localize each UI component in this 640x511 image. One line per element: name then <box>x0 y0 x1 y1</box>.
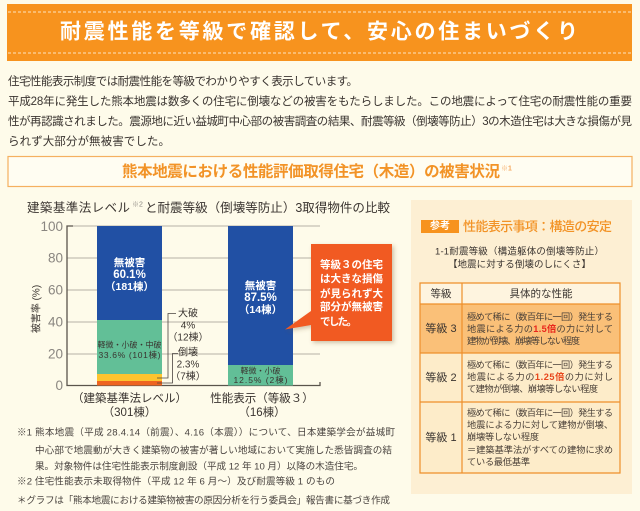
footnotes: ＊グラフは「熊本地震における建築物被害の原因分析を行う委員会」報告書に基づき作成 <box>17 494 390 506</box>
x axis labels: （301棟） <box>103 405 156 419</box>
chart title <box>27 200 390 215</box>
y axis tick labels: 80 <box>48 250 63 266</box>
row: grade 3 <box>425 311 613 346</box>
table header: 具体的な性能 <box>510 287 573 300</box>
row: grade 2 <box>425 359 613 394</box>
title banner <box>7 4 632 61</box>
reference badge <box>421 219 459 233</box>
callout: 部分が無被害 <box>320 300 383 313</box>
callout: が見られず大 <box>320 287 384 300</box>
intro text: 住宅性能表示制度では耐震性能を等級でわかりやすく表示しています。 <box>8 74 358 88</box>
grid lines and axis <box>67 226 320 386</box>
bar: building standard level: 60.1% <box>113 269 146 281</box>
section heading: ※1 <box>501 164 512 172</box>
panel subtitle: 1-1耐震等級（構造躯体の倒壊等防止） <box>435 246 604 258</box>
y axis tick labels: 40 <box>48 314 63 330</box>
chart title: 建築基準法レベル <box>27 200 130 215</box>
callout: 等級３の住宅 <box>320 258 384 271</box>
label: collapse: 2.3% <box>177 360 200 370</box>
row: grade 1: ＝建築基準法がすべての建物に求め <box>467 444 613 455</box>
panel heading: 性能表示事項：構造の安定 <box>463 219 612 234</box>
row: grade 2: て建物が倒壊、崩壊等しない程度 <box>467 383 598 394</box>
row: grade 2: 地震による力の1.25倍の力に対し <box>467 371 613 382</box>
table header: 等級 <box>430 287 452 300</box>
label: collapse: 倒壊 <box>178 346 198 358</box>
x axis labels: （建築基準法レベル） <box>72 391 187 405</box>
intro text <box>8 74 632 148</box>
bar: building standard level: 軽微・小破・中破 <box>98 340 162 350</box>
panel subtitle <box>435 246 604 270</box>
x axis labels: （16棟） <box>238 405 286 419</box>
intro text: 平成28年に発生した熊本地震は数多くの住宅に倒壊などの被害をもたらしました。この地震によって住宅の耐震性能の重要 <box>8 94 632 108</box>
y axis tick labels: 60 <box>48 282 63 298</box>
footnotes: 果。対象物件は住宅性能表示制度創設（平成 12 年 10 月）以降の木造住宅。 <box>35 460 363 472</box>
y axis tick labels <box>40 219 63 393</box>
row: grade 2: 極めて稀に（数百年に一回）発生する <box>467 359 613 370</box>
intro text: 性が再認識されました。震源地に近い益城町中心部の被害調査の結果、耐震等級（倒壊等防止）3の木造住宅は大きな損傷が見 <box>8 114 632 128</box>
panel subtitle: 【地震に対する倒壊のしにくさ】 <box>448 258 591 270</box>
row: grade 3: 地震による力の1.5倍の力に対して <box>467 323 613 334</box>
x axis labels <box>72 391 314 419</box>
bar: grade 3: （14棟） <box>239 303 282 316</box>
bar: building standard level: 無被害 <box>114 256 145 269</box>
label: collapse: （7棟） <box>170 370 206 382</box>
label: major damage: 4% <box>181 320 195 332</box>
y axis title: 被害率 (%) <box>30 285 42 333</box>
footnotes: ※1 <box>17 428 32 438</box>
chart title: ※2 <box>132 200 143 208</box>
callout <box>285 244 392 341</box>
section heading <box>8 156 632 186</box>
title banner: 耐震性能を等級で確認して、安心の住まいづくり <box>60 20 578 44</box>
row: grade 3: 等級 3 <box>425 321 457 335</box>
chart title: と耐震等級（倒壊等防止）3取得物件の比較 <box>145 200 390 215</box>
footnotes <box>17 426 395 506</box>
row: grade 1: 等級 1 <box>425 430 457 444</box>
y axis tick labels: 0 <box>55 378 63 393</box>
row: grade 3: 建物が倒壊、崩壊等しない程度 <box>467 335 580 346</box>
y axis tick labels: 20 <box>48 346 63 362</box>
table header <box>430 287 573 300</box>
reference badge: 参考 <box>430 219 450 232</box>
table <box>420 283 620 473</box>
label: major damage: 大破 <box>178 306 198 320</box>
footnotes: 熊本地震（平成 28.4.14（前震）、4.16（本震））について、日本建築学会が益城町 <box>35 426 395 438</box>
label: major damage: （12棟） <box>167 330 209 344</box>
row: grade 1: 崩壊等しない程度 <box>467 431 539 442</box>
bar: building standard level: 33.6% (101棟) <box>98 350 161 360</box>
bar: grade 3: 無被害 <box>245 279 276 292</box>
bar: grade 3: 軽微・小破 <box>240 366 280 376</box>
row: grade 2: 等級 2 <box>425 370 457 384</box>
bar: building standard level: （181棟） <box>105 280 154 293</box>
callout: は大きな損傷 <box>320 272 384 285</box>
bar: grade 3: 87.5% <box>244 292 277 304</box>
footnotes: ※2 住宅性能表示未取得物件（平成 12 年 6 月～）及び耐震等級 1 のもの <box>17 476 335 488</box>
x axis labels: 性能表示（等級３） <box>210 391 314 405</box>
row: grade 1: ている最低基準 <box>467 456 530 467</box>
row: grade 1: 極めて稀に（数百年に一回）発生する <box>467 407 613 418</box>
footnotes: 中心部で地震動が大きく建築物の被害が著しい地域において実施した悉皆調査の結 <box>35 444 392 456</box>
label: collapse <box>157 346 206 383</box>
bar: building standard level <box>97 226 162 386</box>
bar: grade 3 <box>228 226 293 386</box>
panel: reference <box>411 200 632 494</box>
row: grade 1: 地震による力に対して建物が倒壊、 <box>467 419 613 430</box>
stacked bar chart <box>30 219 320 419</box>
intro text: られず大部分が無被害でした。 <box>8 134 170 148</box>
row: grade 1 <box>425 407 613 467</box>
section heading: 熊本地震における性能評価取得住宅（木造）の被害状況 <box>122 162 500 180</box>
bar: grade 3: 12.5% (2棟) <box>234 375 288 385</box>
row: grade 3: 極めて稀に（数百年に一回）発生する <box>467 311 613 322</box>
y axis tick labels: 100 <box>40 219 63 234</box>
label: major damage <box>157 306 209 378</box>
callout: でした。 <box>320 316 357 328</box>
